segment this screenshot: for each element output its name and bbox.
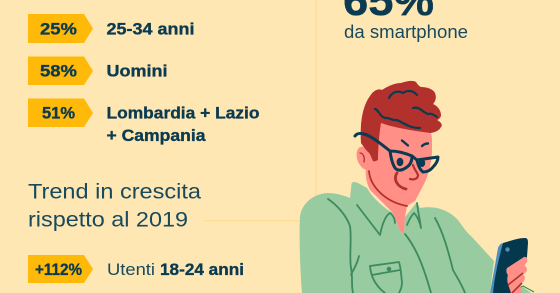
- hair strands: [375, 91, 437, 128]
- stat row: 25-34 anni: 25%: [40, 20, 77, 38]
- stat row: regions: [28, 98, 260, 145]
- stat row: Utenti 18-24 anni: [28, 255, 244, 283]
- heading: trend: [28, 180, 201, 232]
- stat: 65% da smartphone: da smartphone: [344, 22, 468, 42]
- ear inner line: [360, 153, 364, 162]
- face and neck: [366, 123, 432, 234]
- stat row: Uomini: 58%: [40, 63, 77, 81]
- glasses: [355, 133, 438, 172]
- stat row: Utenti 18-24 anni: 18-24 anni: [160, 261, 244, 279]
- hair: [361, 81, 442, 161]
- phone: [490, 238, 528, 293]
- nose, cheek and jaw lines: [369, 165, 418, 206]
- stat row: 25-34 anni: 25-34 anni: [106, 20, 194, 38]
- heading: trend: rispetto al 2019: [28, 208, 188, 232]
- heading: trend: Trend in crescita: [28, 180, 201, 203]
- eyebrows: [402, 140, 428, 146]
- stat row: Uomini: [28, 56, 168, 85]
- stat row: 25-34 anni: [28, 14, 194, 43]
- stat row: Utenti 18-24 anni: Utenti: [107, 261, 155, 279]
- hand: [506, 257, 527, 293]
- eyes: [397, 158, 425, 167]
- stat row: regions: Lombardia + Lazio: [106, 104, 260, 122]
- stat row: Uomini: Uomini: [106, 63, 168, 81]
- ear: [357, 146, 376, 170]
- stat row: regions: + Campania: [106, 127, 206, 145]
- illustration: man with smartphone: [300, 81, 534, 293]
- stat row: regions: 51%: [42, 104, 75, 122]
- stat row: Utenti 18-24 anni: +112%: [35, 261, 82, 279]
- stat: 65% da smartphone: [343, 0, 468, 42]
- shirt: [300, 182, 534, 293]
